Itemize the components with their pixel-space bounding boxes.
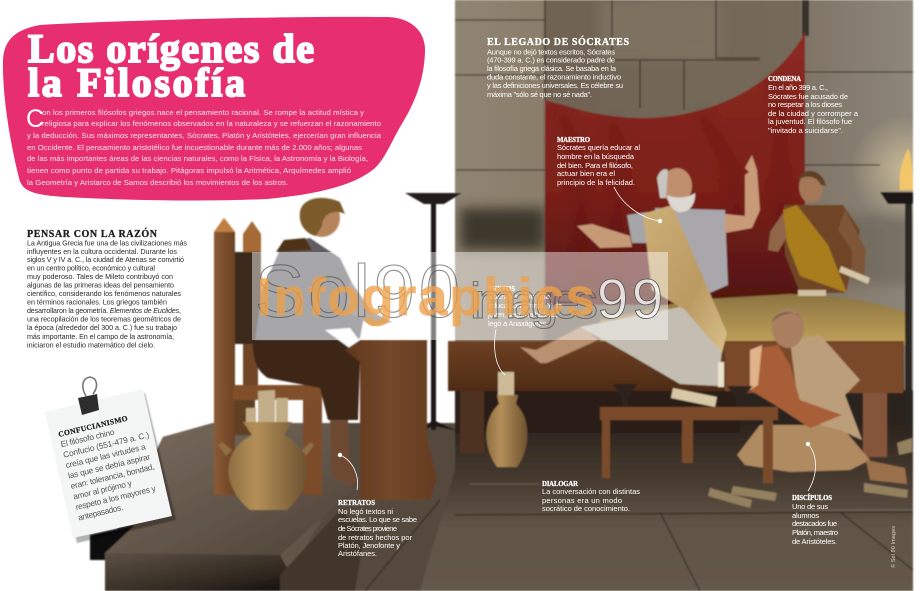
body: desarrollaron la geometría. Elementos de Euclides, <box>27 306 181 315</box>
intro paragraph: religiosa para explicar los fenómenos observados en la naturaleza y se refuerzan el razonamiento <box>42 119 381 128</box>
body: en un centro político, económico y cultural <box>27 264 155 272</box>
callout: Dialogar: La conversación con distintas <box>542 487 640 496</box>
body: la época (alrededor del 300 a. C.) fue su trabajo <box>27 323 177 332</box>
body: siglos V y IV a. C., la ciudad de Atenas se convirtió <box>27 255 184 264</box>
title banner <box>3 17 425 200</box>
skirt <box>580 305 722 386</box>
body: en términos racionales. Los griegos también <box>27 298 167 306</box>
head <box>772 308 804 348</box>
foot <box>866 460 907 484</box>
card text: Confucio (551-479 a. C.) <box>62 429 150 460</box>
callout: Textos: legó a Anaxágoras. <box>488 319 548 328</box>
callout: Condena: "invitado a suicidarse". <box>768 126 843 135</box>
large amphora <box>218 390 314 510</box>
pointer line <box>614 187 660 221</box>
outlined logo text: images <box>470 273 598 329</box>
callout: Discípulos: alumnos <box>792 511 819 520</box>
body: influyentes en la cultura occidental. Durante los <box>27 247 177 256</box>
mattress <box>600 294 905 345</box>
callout: Discípulos: Uno de sus <box>792 502 828 511</box>
callout: Condena: Sócrates fue acusado de <box>768 92 848 101</box>
intro paragraph: de las más importantes áreas de las ciencias naturales, como la Física, la Astronomía y la Biología, <box>27 154 368 163</box>
raised stone slab top <box>105 423 352 555</box>
callout: Condena: CONDENA <box>768 76 801 83</box>
intro paragraph: la Geometría y Aristarco de Samos describió los movimientos de los astros. <box>27 178 288 187</box>
floor <box>105 423 913 591</box>
card text: eran: tolerancia, bondad, <box>70 461 156 491</box>
callout: Discípulos: Platón, maestro <box>792 528 838 537</box>
card text: amor al prójimo y <box>72 478 134 501</box>
skirt <box>737 425 870 472</box>
callout: Textos: educación formal. Y de <box>488 301 562 310</box>
raised arm <box>725 155 760 233</box>
card text <box>57 410 165 522</box>
body: más importante. En el campo de la astronomía, <box>27 332 174 341</box>
note card: Confucianismo <box>45 377 176 543</box>
brown tunic <box>784 205 860 293</box>
arm <box>346 280 392 326</box>
callout: Maestro: del bien. Para el filósofo, <box>557 161 633 170</box>
callout: Retratos: Aristófanes. <box>338 549 377 558</box>
text block: Pensar con la razón <box>27 228 187 350</box>
pink panel shape <box>3 17 425 200</box>
left torch <box>405 193 462 431</box>
pointer line <box>808 444 816 491</box>
card shadow <box>47 393 176 543</box>
yellow scarf <box>783 205 847 293</box>
sweater <box>255 238 365 345</box>
callout: Maestro: principio de la felicidad. <box>557 178 635 187</box>
text block: El legado de Sócrates <box>487 36 629 99</box>
tunic <box>790 335 862 440</box>
outlined logo text <box>255 250 598 333</box>
head <box>304 199 340 237</box>
callout: Textos: joven, según la historia, <box>487 310 558 319</box>
body: duda constante, el razonamiento inductivo <box>487 72 621 82</box>
callout: Retratos: No legó textos ni <box>338 507 393 516</box>
floor under desk and left slab area <box>163 423 455 591</box>
orange wordmark: Infographics <box>257 268 595 327</box>
icon: binder clip <box>78 377 99 415</box>
callout: Condena: de la ciudad y corromper a <box>768 109 859 118</box>
body: Aunque no dejó textos escritos, Sócrates <box>487 48 615 56</box>
title <box>28 26 314 105</box>
raised stone slab front <box>105 553 300 591</box>
intro paragraph: tienen como punto de partida su trabajo. Pitágoras impulsó la Aritmética, Arquímedes amplió <box>27 166 351 175</box>
callout: Maestro: Sócrates quería educar al <box>557 143 640 152</box>
callout: Discípulos <box>792 442 838 546</box>
callout: Textos: TEXTOS <box>488 286 515 293</box>
callout: Retratos: de retratos hechos por <box>338 533 412 542</box>
photo credit: © Sol 90 Images <box>890 526 897 568</box>
callout: Maestro: MAESTRO <box>557 137 590 144</box>
outlined logo text: Sol90 <box>255 250 460 333</box>
callout: Dialogar: socrático de conocimiento. <box>542 504 630 513</box>
title: la Filosofía <box>28 60 245 105</box>
head <box>799 171 823 203</box>
low table <box>600 362 778 483</box>
title: Los orígenes de <box>28 26 314 71</box>
heading: EL LEGADO DE SÓCRATES <box>487 36 629 48</box>
callout: Retratos: escuelas. Lo que se sabe <box>338 515 417 524</box>
stone wall <box>455 0 920 440</box>
callout: Maestro: actuar bien era el <box>557 169 615 178</box>
callout: Discípulos: de Aristóteles. <box>792 537 837 546</box>
paper <box>45 389 172 538</box>
callout: Retratos: Platón, Jenofonte y <box>338 541 400 550</box>
intro paragraph: on los primeros filósofos griegos nace el pensamiento racional. Se rompe la actitud mística y <box>42 108 364 117</box>
second slab <box>280 510 365 591</box>
callout: Textos: Sócrates tuvo una <box>488 292 551 301</box>
socrates <box>520 155 760 386</box>
callout: Retratos: RETRATOS <box>338 500 375 507</box>
callout: Dialogar: DIALOGAR <box>542 481 578 488</box>
chair <box>214 218 322 495</box>
leg <box>520 326 598 363</box>
callout: Condena: no respetar a los dioses <box>768 100 842 109</box>
scroll <box>839 266 870 284</box>
intro paragraph: en Occidente. El pensamiento aristotélico fue incuestionable durante más de 2.000 años; algunas <box>27 143 362 152</box>
body: La Antigua Grecia fue una de las civilizaciones más <box>27 238 187 248</box>
callout: Condena <box>768 76 859 135</box>
tunic <box>655 208 728 295</box>
jug by the bed <box>486 372 527 467</box>
callout: Discípulos: destacados fue <box>792 519 837 528</box>
scrolls on the floor <box>708 438 912 508</box>
callout: Maestro <box>557 137 662 223</box>
card text: El filósofo chino <box>60 427 116 449</box>
body: muy poderoso. Tales de Mileto contribuyó con <box>27 272 173 281</box>
card text: respeto a los mayores y <box>75 483 157 512</box>
floor slab joints <box>365 484 913 591</box>
body: la filosofía griega clásica. Se basaba en la <box>487 64 617 73</box>
right torch <box>880 148 913 432</box>
left arm <box>577 224 632 248</box>
pointer line <box>495 329 505 375</box>
desk <box>345 340 437 500</box>
callout: Retratos: de Sócrates proviene <box>338 524 397 533</box>
callout: Dialogar <box>542 481 640 513</box>
intro paragraph: y la deducción. Sus máximos representantes, Sócrates, Platón y Aristóteles, ejercerían gran influencia <box>27 131 382 140</box>
callout: Maestro: hombre en la búsqueda <box>557 152 635 161</box>
intro paragraph: C <box>26 105 44 133</box>
callout: Dialogar: personas era un modo <box>542 496 622 505</box>
card text: creía que las virtudes a <box>65 441 147 470</box>
callout: Discípulos: DISCÍPULOS <box>792 494 832 502</box>
black block under card <box>90 525 135 560</box>
heading: PENSAR CON LA RAZÓN <box>27 228 158 240</box>
watermark <box>252 250 668 340</box>
student at desk <box>253 198 392 486</box>
body: (470-399 a. C.) es considerado padre de <box>487 56 615 64</box>
translucent plate <box>252 252 668 340</box>
white numerals: 99 <box>597 267 663 330</box>
head <box>662 168 692 204</box>
arms <box>768 213 790 252</box>
seated student on floor <box>737 308 907 484</box>
red curtain <box>545 32 805 305</box>
seated disciple on bed <box>768 171 870 296</box>
paper <box>325 328 366 352</box>
card text: CONFUCIANISMO <box>57 414 129 439</box>
pointer line <box>340 455 358 490</box>
card text: antepasados. <box>77 502 124 522</box>
callout: Condena: la juventud. El filósofo fue <box>768 117 852 126</box>
body <box>27 238 187 350</box>
body: máxima "sólo sé que no sé nada". <box>487 90 592 99</box>
skirt and leg <box>253 340 360 420</box>
body: una recopilación de los teoremas geométricos de <box>27 314 181 324</box>
body: y las definiciones universales. Es célebre su <box>487 81 623 90</box>
cloak <box>643 205 727 353</box>
body: iniciaron el estudio matemático del cielo. <box>27 340 155 350</box>
body: científico, considerando los fenómenos naturales <box>27 289 181 298</box>
bed frame <box>448 341 904 457</box>
callout: Retratos <box>338 453 417 558</box>
card text: las que se debía aspirar <box>67 451 151 481</box>
orange cloak <box>750 345 842 428</box>
callout: Condena: En el año 399 a. C., <box>768 83 828 92</box>
callout: Textos <box>487 286 562 375</box>
intro paragraph <box>26 105 382 187</box>
body: algunas de las primeras ideas del pensamiento <box>27 280 174 290</box>
body <box>487 48 623 99</box>
